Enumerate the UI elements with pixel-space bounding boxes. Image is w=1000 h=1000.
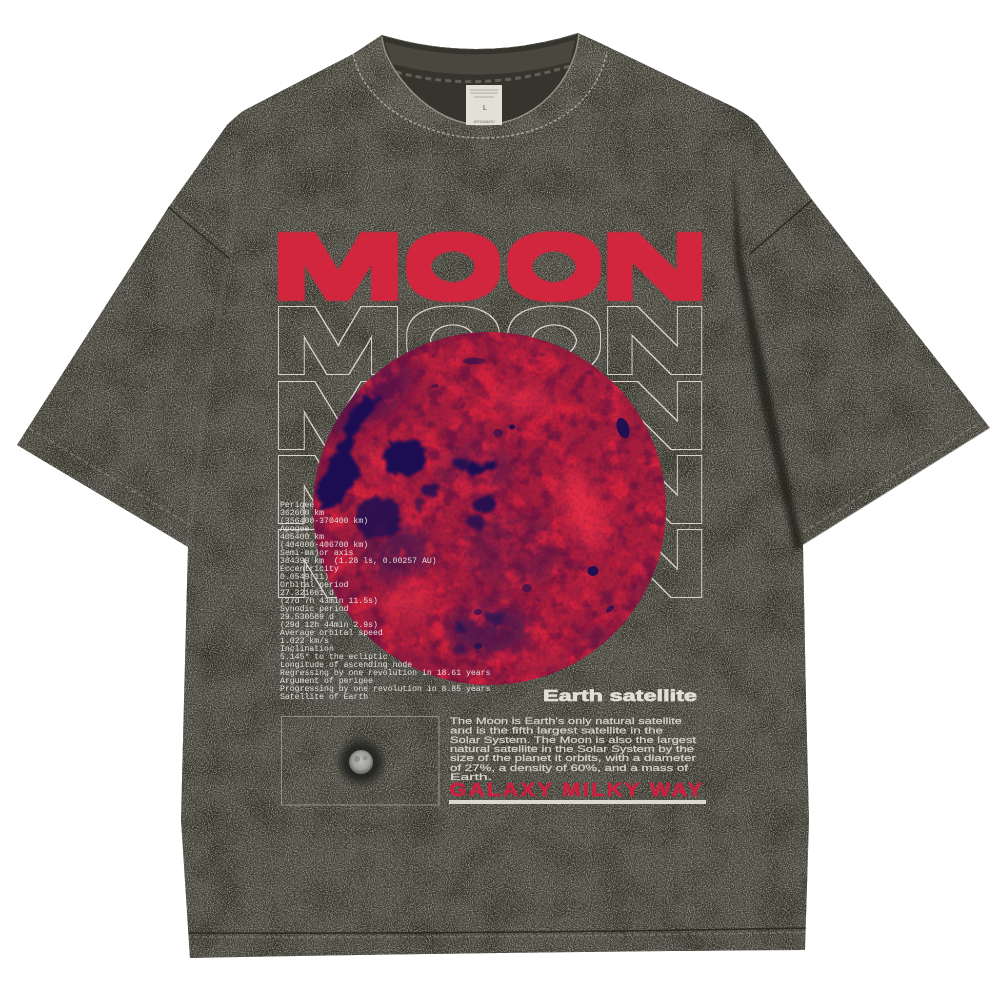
outlined MOON row 1	[270, 293, 709, 389]
outlined MOON row 4	[270, 516, 709, 612]
description paragraph: size of the planet it orbits, with a diameter	[450, 753, 696, 763]
title: MOON: O	[404, 219, 502, 315]
title: MOON	[270, 219, 709, 315]
back neck rib	[385, 40, 575, 75]
heading: Earth satellite: Earth satellite	[543, 688, 697, 705]
left sleeve hem stitching	[29, 428, 190, 525]
left shoulder stitch	[172, 203, 232, 252]
outlined MOON row 1: O	[505, 293, 603, 389]
outlined MOON row 2: M	[270, 368, 405, 464]
right sleeve hem stitching	[803, 424, 978, 532]
collar outer stitching	[353, 52, 607, 138]
outlined MOON row 4: O	[505, 516, 603, 612]
outlined MOON row 2: N	[600, 368, 709, 464]
slogan underline bar	[449, 800, 706, 804]
description paragraph: Solar System. The Moon is also the largest	[450, 735, 697, 745]
outlined MOON row 1: M	[270, 293, 405, 389]
outlined MOON row 3: O	[505, 442, 603, 538]
outlined MOON row 1: O	[404, 293, 502, 389]
collar inner edge highlight	[382, 34, 579, 125]
outlined MOON row 4: O	[404, 516, 502, 612]
dark maria	[317, 393, 506, 655]
outlined MOON row 2: O	[404, 368, 502, 464]
neck opening interior	[382, 34, 578, 122]
outlined MOON row 4: M	[270, 516, 405, 612]
right shoulder stitch	[752, 197, 805, 244]
orbital data text block: Perigee 362600 km (356400-370400 km) Apogee 405400 km (404000-406700 km) Semi-major axis 384399 km (1.28 ls, 0.00257 AU) Eccentricity 0.0549(11) Orbital period 27.321661 d (27d 7h 43min 11.5s) Synodic period 29.530589 d (29d 12h 44min 2.9s) Average orbital speed 1.022 km/s Inclination 5.145° to the ecliptic Longitude of ascending node Regressing by one revolution in 18.61 years Argument of perigee Progressing by one revolution in 8.85 years Satellite of Earth	[280, 501, 490, 702]
neck size label: ARTIGIANATO	[473, 120, 495, 124]
outlined MOON row 1: N	[600, 293, 709, 389]
small craters	[431, 358, 632, 649]
title: MOON: O	[505, 219, 603, 315]
soft purple regions	[319, 352, 664, 663]
bright highlands	[369, 388, 614, 666]
right sleeve edge highlight	[803, 428, 990, 545]
back neck tape seam	[396, 66, 570, 82]
slogan: GALAXY MILKY WAY: GALAXY MILKY WAY	[450, 780, 704, 800]
moon disc	[313, 332, 666, 685]
title: MOON: M	[270, 219, 405, 315]
moon fine texture	[313, 332, 667, 686]
right body fold shadow	[733, 160, 803, 550]
red moon illustration	[313, 332, 666, 685]
description paragraph: and is the fifth largest satellite in the	[450, 726, 663, 736]
outlined MOON row 3	[270, 442, 709, 538]
neck size label	[466, 85, 502, 125]
bottom hem seam	[186, 928, 808, 933]
title: MOON: N	[600, 219, 709, 315]
outlined MOON row 3: O	[404, 442, 502, 538]
description paragraph	[450, 716, 697, 782]
description paragraph: Earth.	[450, 772, 492, 782]
outlined MOON row 2	[270, 368, 709, 464]
description paragraph: natural satellite in the Solar System by the	[450, 744, 694, 754]
neck size label: L	[483, 105, 487, 112]
description paragraph: of 27%, a density of 60%, and a mass of	[450, 763, 689, 773]
left shoulder seam	[168, 207, 230, 259]
outlined MOON row 3: N	[600, 442, 709, 538]
outlined MOON row 4: N	[600, 516, 709, 612]
right shoulder seam	[750, 199, 813, 254]
description paragraph: The Moon is Earth's only natural satellite	[450, 716, 682, 726]
bottom hem stitching	[186, 932, 808, 937]
left body fold highlight	[188, 145, 239, 547]
collar band tone	[353, 33, 607, 138]
moon red mottling	[313, 332, 667, 686]
moon purple mottling	[313, 332, 667, 686]
outlined MOON row 3: M	[270, 442, 405, 538]
outlined MOON row 2: O	[505, 368, 603, 464]
framed small moon box	[282, 716, 439, 805]
